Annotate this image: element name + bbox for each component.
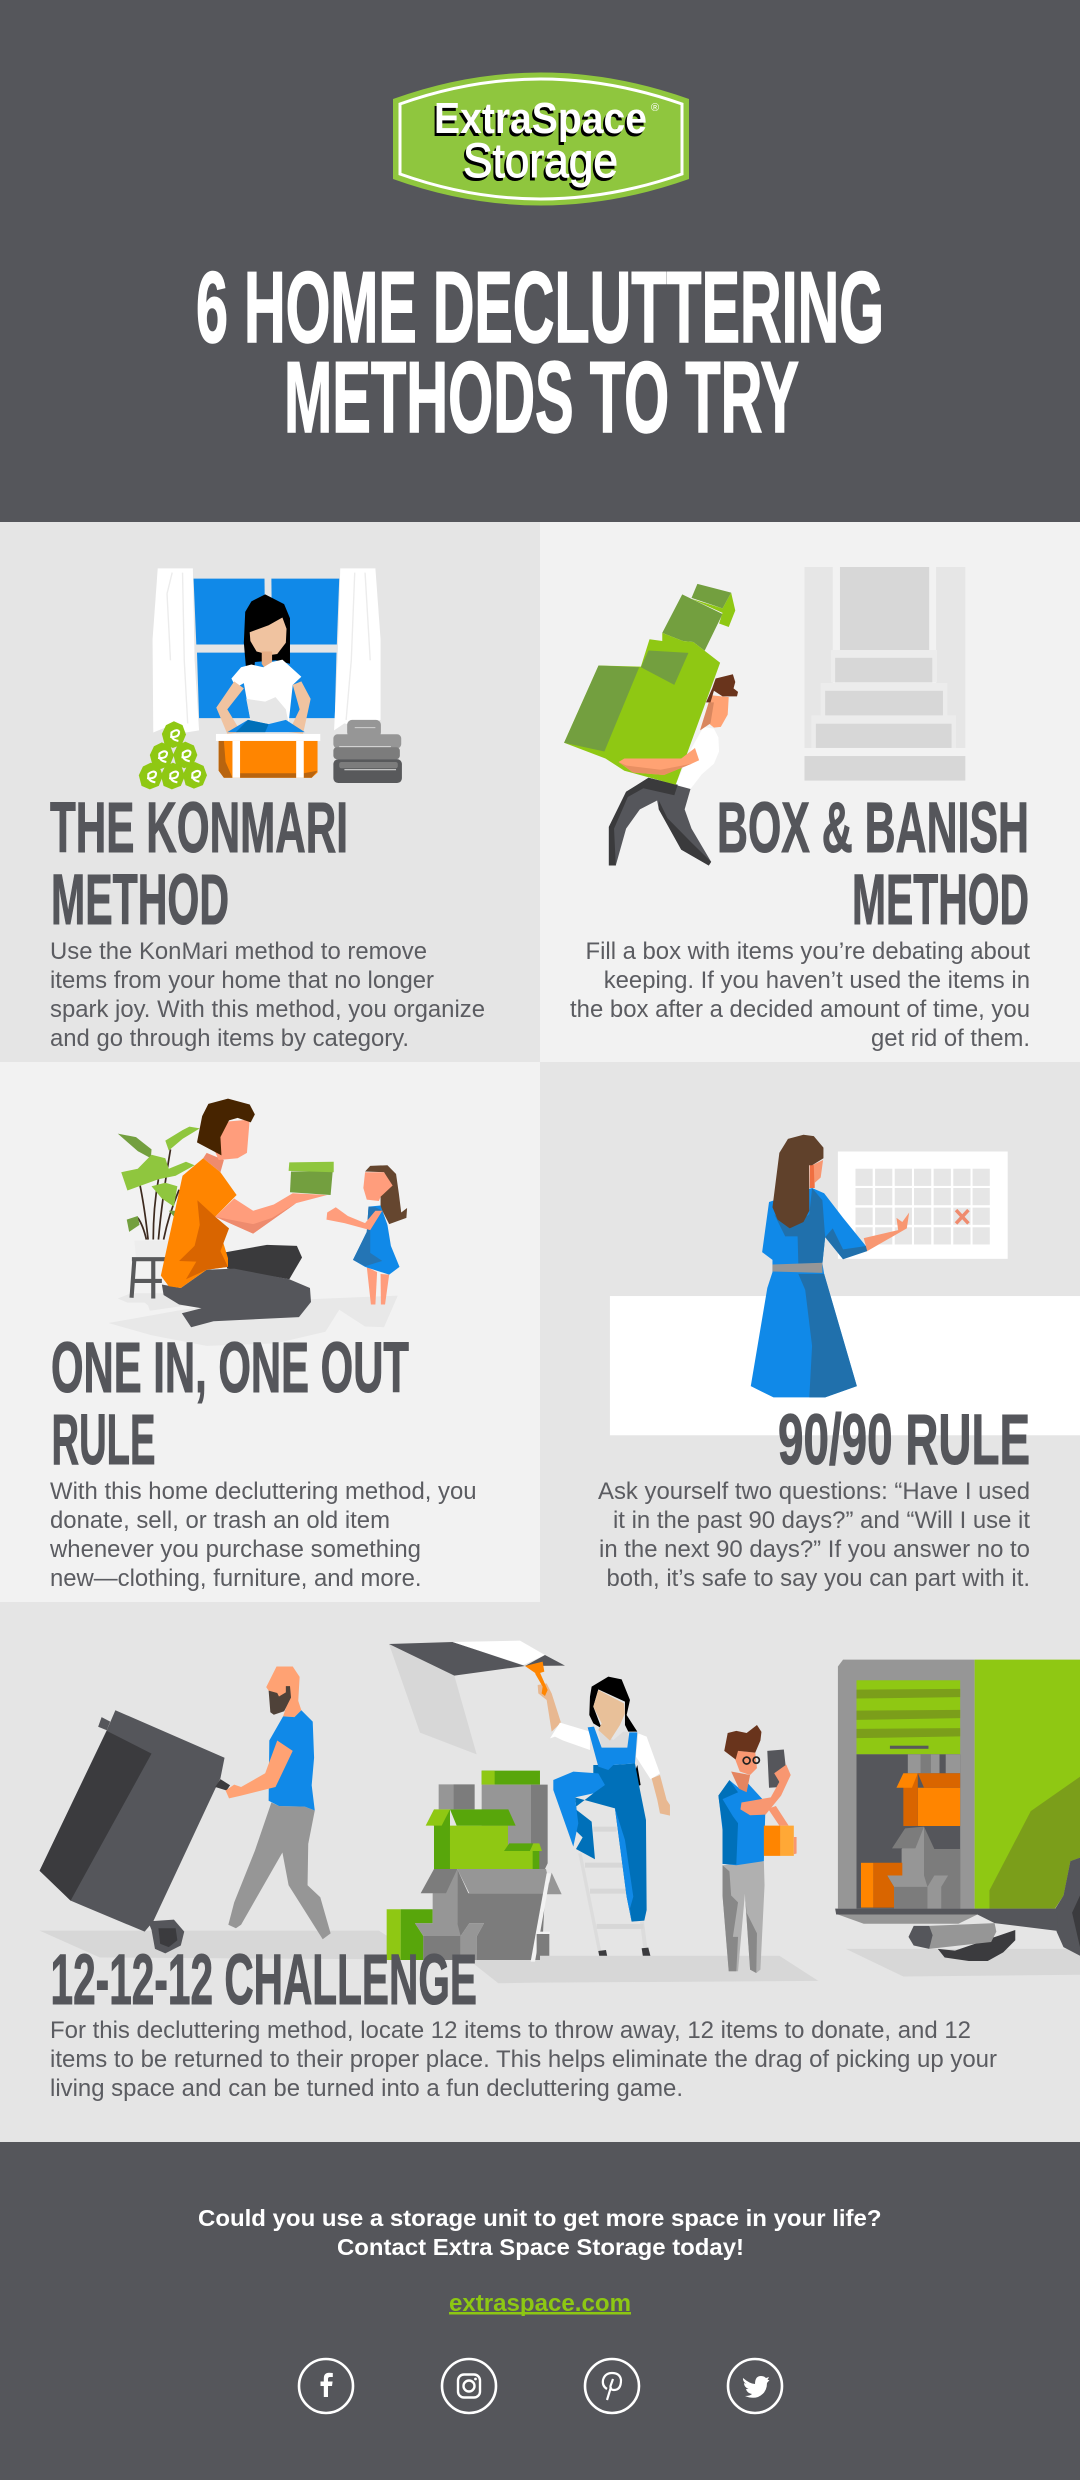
panel: 12-12-12 Challenge [0, 1602, 1080, 2142]
icon: facebook [299, 2359, 353, 2413]
body text: KonMari [50, 938, 485, 1052]
body text: Box & Banish: the box after a decided amount of time, you [570, 996, 1030, 1023]
body text: One In, One Out: donate, sell, or trash an old item [50, 1507, 390, 1534]
body text: 12-12-12 Challenge [50, 2017, 997, 2102]
body text: One In, One Out: whenever you purchase something [49, 1536, 421, 1563]
icon: pinterest [585, 2359, 639, 2413]
heading: One In, One Out Rule [51, 1329, 409, 1480]
body text: One In, One Out: new—clothing, furniture, and more. [50, 1565, 422, 1592]
illustration: moving truck [835, 1660, 1080, 1976]
heading: The KonMari Method: METHOD [51, 861, 229, 940]
body text: KonMari: and go through items by category. [50, 1025, 409, 1052]
heading: Box & Banish Method [717, 789, 1029, 940]
panel: footer [0, 2142, 1080, 2480]
call to action [198, 2205, 882, 2260]
title [196, 252, 884, 454]
illustration: man pushing a bin [40, 1666, 400, 1959]
heading: The KonMari Method: THE KONMARI [50, 789, 348, 868]
body text: 12-12-12 Challenge: living space and can be turned into a fun decluttering game. [50, 2075, 683, 2102]
body text: KonMari: spark joy. With this method, you organize [50, 996, 485, 1023]
body text: 90/90 Rule: Ask yourself two questions: “Have I used [598, 1478, 1030, 1505]
illustration: woman folding by a window [139, 568, 402, 789]
logo: Extra Space Storage: ExtraSpace [434, 94, 647, 143]
illustration: parent handing box to child [108, 1099, 407, 1346]
body text: One In, One Out [49, 1478, 477, 1592]
body text: 90/90 Rule: it in the past 90 days?” and “Will I use it [613, 1507, 1030, 1534]
illustration: woman on ladder with boxes [387, 1641, 680, 1983]
body text: 12-12-12 Challenge: For this decluttering method, locate 12 items to throw away, 12 items to donate, and 12 [50, 2017, 971, 2044]
body text: 90/90 Rule: in the next 90 days?” If you answer no to [599, 1536, 1030, 1563]
body text: 90/90 Rule: both, it’s safe to say you can part with it. [606, 1565, 1030, 1592]
panel: 90/90 Rule [540, 1062, 1080, 1602]
icon: twitter [728, 2359, 782, 2413]
body text: Box & Banish [570, 938, 1030, 1052]
body text: Box & Banish: get rid of them. [871, 1025, 1030, 1052]
body text: One In, One Out: With this home decluttering method, you [50, 1478, 477, 1505]
logo: Extra Space Storage: ® [651, 102, 659, 114]
logo: Extra Space Storage [393, 72, 689, 206]
panel: One In, One Out Rule [0, 1062, 540, 1602]
heading: 12-12-12 Challenge: 12-12-12 CHALLENGE [50, 1941, 477, 2020]
heading: One In, One Out Rule: ONE IN, ONE OUT [51, 1329, 409, 1408]
call to action: Contact Extra Space Storage today! [337, 2234, 744, 2260]
calendar [838, 1152, 1008, 1259]
body text: 90/90 Rule [598, 1478, 1030, 1592]
body text: KonMari: items from your home that no longer [50, 967, 434, 994]
panel: The KonMari Method [0, 522, 540, 1062]
panel: Box & Banish Method [540, 522, 1080, 1062]
illustration: doorway with steps [804, 567, 965, 781]
illustration: man with phone and box [540, 1725, 818, 1983]
website link: extraspace.com [449, 2290, 631, 2317]
logo: Extra Space Storage: Storage [463, 135, 618, 188]
body text: KonMari: Use the KonMari method to remove [50, 938, 427, 965]
body text: 12-12-12 Challenge: items to be returned to their proper place. This helps eliminate the drag of picking up your [50, 2046, 997, 2073]
panel: header [0, 0, 1080, 522]
icon: instagram [442, 2359, 496, 2413]
body text: Box & Banish: keeping. If you haven’t used the items in [604, 967, 1030, 994]
body text: Box & Banish: Fill a box with items you’re debating about [586, 938, 1030, 965]
call to action: Could you use a storage unit to get more space in your life? [198, 2205, 882, 2231]
illustration: woman marking a calendar [610, 1135, 1080, 1435]
illustration: man carrying boxes [564, 584, 738, 865]
heading: The KonMari Method [50, 789, 348, 940]
heading: One In, One Out Rule: RULE [52, 1401, 156, 1480]
